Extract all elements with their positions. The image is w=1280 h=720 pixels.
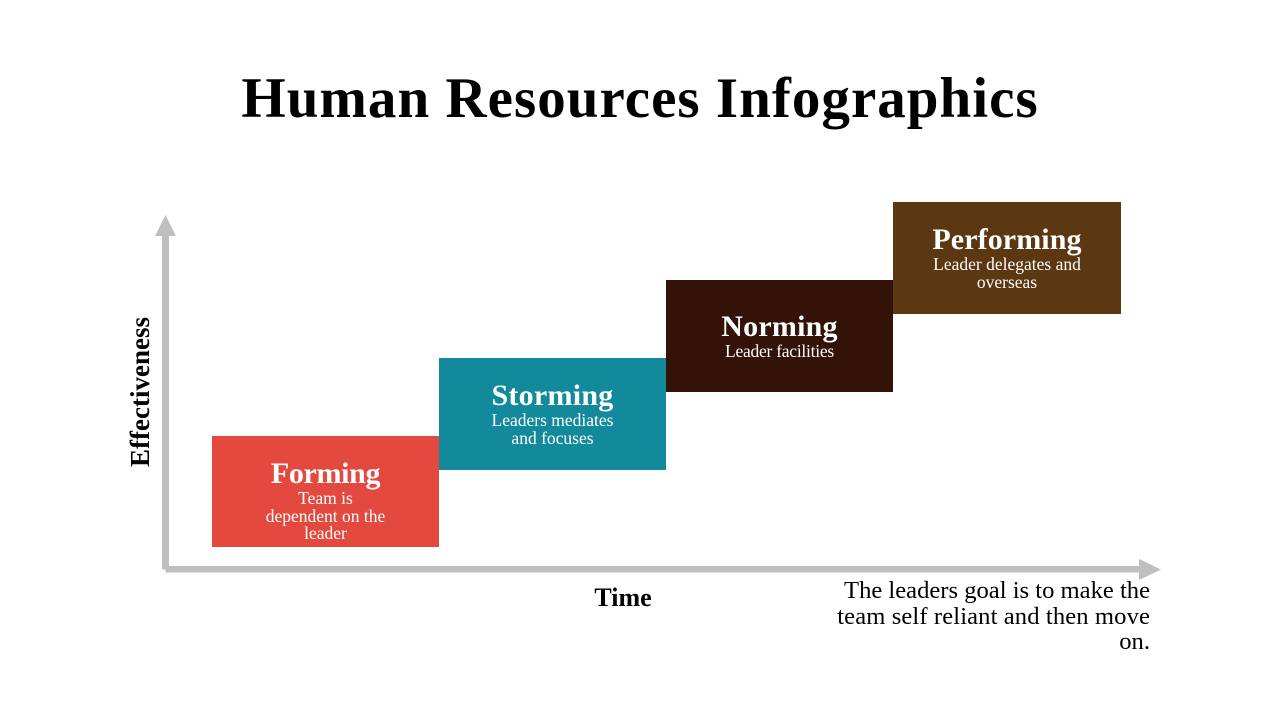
title: Human Resources Infographics [241, 67, 1039, 130]
callout: leader goal [837, 577, 1150, 655]
callout: leader goal: team self reliant and then move [837, 602, 1150, 630]
panel: storming [439, 358, 666, 470]
heading: storming: Storming [492, 379, 614, 412]
callout: leader goal: on. [1119, 628, 1150, 655]
arrow: effectiveness axis [155, 215, 176, 570]
panel: norming [666, 280, 893, 392]
text: norming: Leader facilities [725, 341, 834, 361]
text: storming [492, 410, 613, 448]
text: performing [933, 254, 1081, 292]
text: forming: dependent on the [266, 506, 385, 526]
text: storming: and focuses [511, 428, 594, 448]
arrow: time axis [166, 559, 1161, 580]
axis label: time: Time [594, 583, 652, 612]
text: performing: Leader delegates and [933, 254, 1081, 274]
text: forming: leader [304, 523, 347, 543]
heading: forming: Forming [271, 457, 380, 490]
panel: performing [893, 202, 1121, 314]
callout: leader goal: The leaders goal is to make the [844, 577, 1150, 604]
panel: forming [212, 436, 439, 547]
text: storming: Leaders mediates [492, 410, 613, 430]
text: performing: overseas [977, 272, 1037, 292]
text: forming [266, 488, 385, 543]
heading: norming: Norming [721, 310, 838, 343]
text: forming: Team is [298, 488, 353, 508]
axis label: effectiveness: Effectiveness [125, 317, 155, 467]
heading: performing: Performing [932, 223, 1082, 256]
